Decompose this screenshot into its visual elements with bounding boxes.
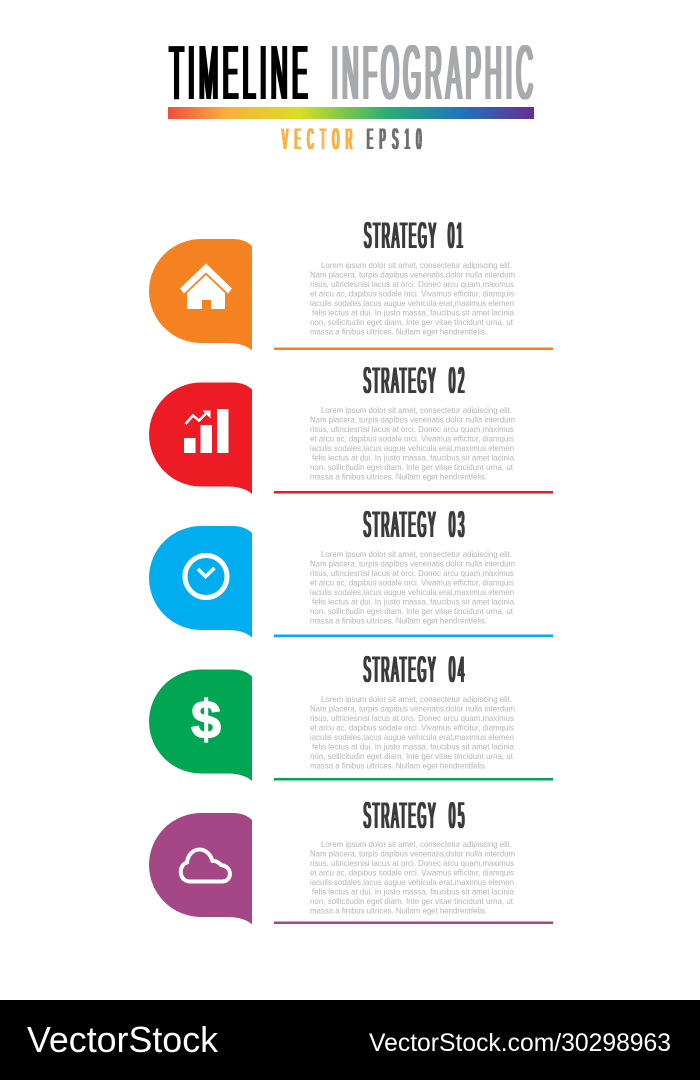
text block: strategy 03: non, sollicitudin eget diam. Inte ger vitae tincidunt urna, ut: [310, 606, 514, 616]
text block: strategy 04: risus, ultriciesnisi lacus at orci. Donec arcu quam,maximus: [310, 713, 514, 723]
text block: strategy 03: Lorem ipsum dolor sit amet, consectetur adipiscing elit.: [321, 549, 512, 559]
text block: strategy 02: risus, ultriciesnisi lacus at orci. Donec arcu quam,maximus: [310, 424, 514, 434]
panel: strategy 01: [149, 214, 553, 350]
heading: strategy 02: 02: [449, 359, 467, 401]
title: [170, 31, 537, 117]
panel: strategy 03: [149, 503, 553, 638]
text block: strategy 02: et arcu ac, dapibus sodale orci. Vivamus efficitur, diamquis: [310, 434, 514, 444]
panel: strategy 05: [149, 794, 553, 924]
subtitle: VECTOR: [282, 122, 359, 156]
text block: strategy 04: iaculis sodales,lacus augue vehicula erat,maximus elemen: [310, 732, 514, 742]
text block: strategy 04: non, sollicitudin eget diam. Inte ger vitae tincidunt urna, ut: [310, 751, 514, 761]
footer image id: VectorStock.com/30298963: [369, 1029, 671, 1057]
heading: strategy 05: 05: [449, 794, 467, 836]
heading: strategy 02: STRATEGY: [364, 359, 437, 401]
heading: strategy 03: 03: [449, 503, 467, 545]
footer bar: [0, 1000, 700, 1080]
heading: strategy 04: STRATEGY: [364, 648, 437, 690]
text block: strategy 05: risus, ultriciesnisi lacus at orci. Donec arcu quam,maximus: [310, 858, 514, 868]
heading: strategy 05: STRATEGY: [364, 794, 437, 836]
text block: strategy 02: Lorem ipsum dolor sit amet, consectetur adipiscing elit.: [321, 405, 512, 415]
text block: strategy 02: iaculis sodales,lacus augue vehicula erat,maximus elemen: [310, 443, 514, 453]
text block: strategy 04: massa a finibus ultrices. Nullam eget hendreritfelis.: [310, 760, 487, 770]
icon: clock: [185, 556, 227, 598]
text block: strategy 02: massa a finibus ultrices. Nullam eget hendreritfelis.: [310, 472, 487, 482]
heading: strategy 01: STRATEGY: [364, 214, 438, 256]
rainbow gradient bar: [168, 107, 534, 119]
icon: cloud: [181, 850, 230, 882]
blue rule: [274, 634, 553, 637]
icon: house: [180, 264, 232, 309]
text block: strategy 04: Lorem ipsum dolor sit amet, consectetur adipiscing elit.: [321, 694, 512, 704]
text block: strategy 05: et arcu ac, dapibus sodale orci. Vivamus efficitur, diamquis: [310, 868, 514, 878]
purple speech tab: [149, 813, 252, 924]
text block: strategy 04: et arcu ac, dapibus sodale orci. Vivamus efficitur, diamquis: [310, 722, 514, 732]
text block: strategy 04: [310, 694, 515, 770]
text block: strategy 05: felis lectus at dui. In justo massa, faucibus sit amet lacinia: [312, 886, 514, 896]
footer brand: VectorStock: [27, 1019, 219, 1060]
text block: strategy 03: iaculis sodales,lacus augue vehicula erat,maximus elemen: [310, 587, 514, 597]
text block: strategy 02: felis lectus at dui. In justo massa, faucibus sit amet lacinia: [312, 452, 514, 462]
purple rule: [274, 922, 553, 924]
heading: strategy 04: 04: [449, 648, 467, 690]
panel: strategy 04: [149, 648, 553, 781]
subtitle: EPS10: [367, 122, 428, 156]
text block: strategy 02: non, sollicitudin eget diam. Inte ger vitae tincidunt urna, ut: [310, 462, 514, 472]
orange speech tab: [149, 239, 252, 350]
text block: strategy 01: Nam placera, turpis dapibus venenatis,dolor nulla interdum: [310, 270, 515, 280]
text block: strategy 01: risus, ultriciesnisi lacus at orci. Donec arcu quam,maximus: [310, 279, 514, 289]
text block: strategy 01: non, sollicitudin eget diam. Inte ger vitae tincidunt urna, ut: [310, 317, 514, 327]
text block: strategy 05: Nam placera, turpis dapibus venenatis,dolor nulla interdum: [310, 848, 515, 858]
icon: rising bar chart: [184, 409, 228, 453]
red speech tab: [149, 382, 252, 494]
text block: strategy 03: [310, 549, 515, 626]
text block: strategy 05: non, sollicitudin eget diam. Inte ger vitae tincidunt urna, ut: [310, 896, 514, 906]
green speech tab: [149, 670, 252, 781]
orange rule: [274, 348, 553, 350]
blue speech tab: [149, 526, 252, 638]
text block: strategy 03: felis lectus at dui. In justo massa, faucibus sit amet lacinia: [312, 596, 514, 606]
title: INFOGRAPHIC: [332, 31, 537, 117]
text block: strategy 04: felis lectus at dui. In justo massa, faucibus sit amet lacinia: [312, 742, 514, 752]
text block: strategy 03: Nam placera, turpis dapibus venenatis,dolor nulla interdum: [310, 558, 515, 568]
panel: strategy 02: [149, 359, 553, 494]
text block: strategy 05: [310, 839, 515, 916]
heading: strategy 03: STRATEGY: [364, 503, 437, 545]
text block: strategy 01: et arcu ac, dapibus sodale orci. Vivamus efficitur, diamquis: [310, 288, 514, 298]
text block: strategy 02: [310, 405, 515, 482]
text block: strategy 01: [310, 260, 515, 336]
text block: strategy 05: iaculis sodales,lacus augue vehicula erat,maximus elemen: [310, 877, 514, 887]
text block: strategy 01: iaculis sodales,lacus augue vehicula erat,maximus elemen: [310, 298, 514, 308]
subtitle: [282, 122, 428, 156]
heading: strategy 01: 01: [448, 214, 465, 256]
text block: strategy 01: felis lectus at dui. In justo massa, faucibus sit amet lacinia: [312, 308, 514, 318]
text block: strategy 05: massa a finibus ultrices. Nullam eget hendreritfelis.: [310, 906, 487, 916]
green rule: [274, 778, 553, 780]
text block: strategy 05: Lorem ipsum dolor sit amet, consectetur adipiscing elit.: [321, 839, 512, 849]
title: TIMELINE: [170, 31, 312, 117]
icon: dollar sign: $: [191, 690, 221, 750]
text block: strategy 02: Nam placera, turpis dapibus venenatis,dolor nulla interdum: [310, 414, 515, 424]
text block: strategy 03: massa a finibus ultrices. Nullam eget hendreritfelis.: [310, 616, 487, 626]
text block: strategy 03: et arcu ac, dapibus sodale orci. Vivamus efficitur, diamquis: [310, 578, 514, 588]
text block: strategy 04: Nam placera, turpis dapibus venenatis,dolor nulla interdum: [310, 704, 515, 714]
red rule: [274, 491, 553, 494]
text block: strategy 01: massa a finibus ultrices. Nullam eget hendreritfelis.: [310, 326, 487, 336]
text block: strategy 01: Lorem ipsum dolor sit amet, consectetur adipiscing elit.: [321, 260, 512, 270]
text block: strategy 03: risus, ultriciesnisi lacus at orci. Donec arcu quam,maximus: [310, 568, 514, 578]
